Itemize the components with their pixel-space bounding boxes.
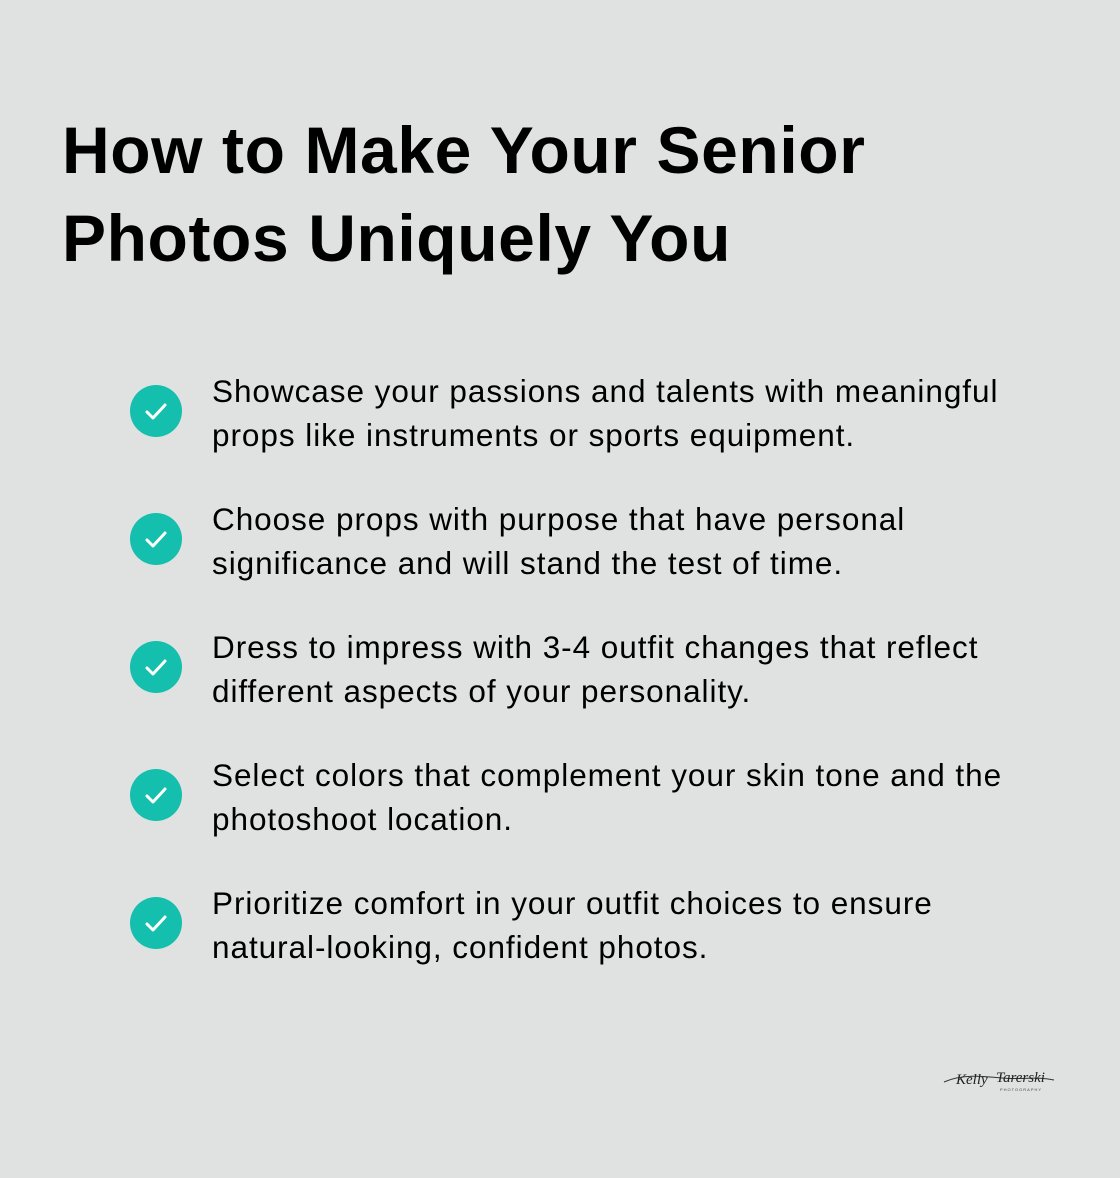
text 4 — [212, 757, 1002, 837]
text 2: Choose props with purpose that have personal — [212, 501, 905, 537]
text 2: significance and will stand the test of time. — [212, 545, 843, 581]
item 2 — [130, 501, 905, 581]
logo: signature: Kelly — [955, 1072, 988, 1088]
logo: signature — [944, 1070, 1054, 1092]
title: How to Make Your Senior — [62, 113, 865, 187]
icon: check — [130, 513, 182, 565]
text 1 — [212, 373, 998, 453]
text 4: Select colors that complement your skin tone and the — [212, 757, 1002, 793]
text 1: Showcase your passions and talents with meaningful — [212, 373, 998, 409]
icon: check — [130, 897, 182, 949]
text 5: natural-looking, confident photos. — [212, 929, 708, 965]
item 3 — [130, 629, 978, 709]
item 4 — [130, 757, 1002, 837]
text 1: props like instruments or sports equipment. — [212, 417, 855, 453]
text 3 — [212, 629, 978, 709]
icon: check — [130, 641, 182, 693]
text 3: different aspects of your personality. — [212, 673, 751, 709]
text 5: Prioritize comfort in your outfit choices to ensure — [212, 885, 933, 921]
icon: check — [130, 385, 182, 437]
title: Photos Uniquely You — [62, 201, 731, 275]
text 2 — [212, 501, 905, 581]
text 3: Dress to impress with 3-4 outfit changes that reflect — [212, 629, 978, 665]
item 1 — [130, 373, 998, 453]
text 5 — [212, 885, 933, 965]
logo: signature: Tarerski — [996, 1070, 1045, 1086]
title — [62, 113, 865, 275]
item 5 — [130, 885, 933, 965]
icon: check — [130, 769, 182, 821]
text 4: photoshoot location. — [212, 801, 513, 837]
logo: signature: PHOTOGRAPHY — [1000, 1087, 1042, 1092]
